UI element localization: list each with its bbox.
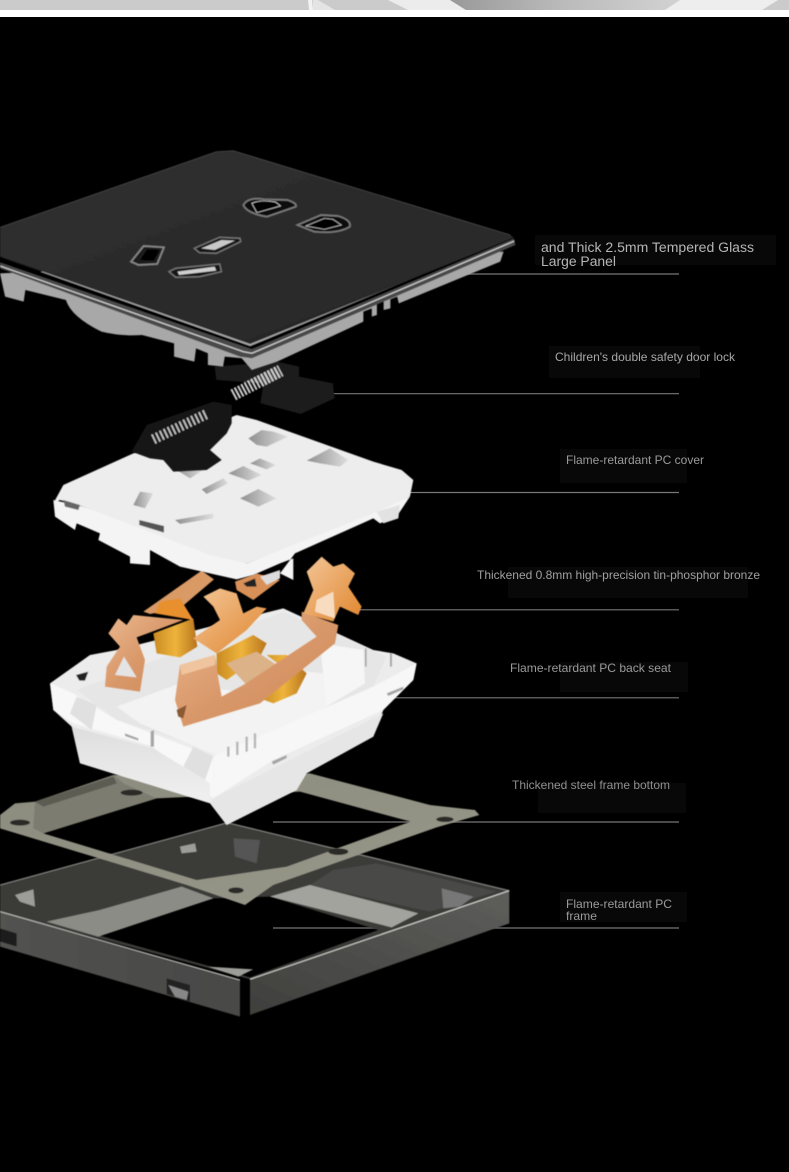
caption: tempered glass panel: and Thick 2.5mm Tempered Glass (541, 240, 754, 255)
cover latch with spring (132, 402, 232, 472)
flame-retardant PC frame (0, 823, 509, 1017)
back seat lower body (72, 727, 210, 803)
contact: right gold barrel (260, 655, 307, 703)
tin-phosphor bronze contacts (105, 557, 362, 727)
socket opening: lower slot (169, 264, 221, 277)
back seat clips (70, 697, 213, 780)
back seat small shadows (125, 648, 403, 765)
back seat silhouette (50, 608, 417, 825)
cover socket wells (133, 430, 348, 524)
steel frame shaded bars (33, 775, 157, 833)
contact: small plate (227, 652, 277, 685)
tray clips (15, 838, 473, 977)
contact: centre clip (193, 588, 267, 653)
back seat inner floor (77, 612, 387, 757)
back seat vents (228, 733, 255, 757)
flame-retardant PC cover (53, 415, 413, 585)
children's safety door lock (215, 362, 335, 414)
socket opening: centre slot (194, 237, 241, 253)
caption: PC frame: Flame-retardant PC (566, 897, 672, 911)
PC back seat (50, 608, 417, 825)
leader lines (273, 274, 679, 928)
frame left outer face (0, 912, 240, 1017)
tempered glass panel (0, 151, 515, 370)
cover top face (53, 415, 413, 563)
contact: left gold barrel (153, 618, 197, 657)
tray ledge shading (310, 863, 497, 912)
tray right plate (270, 885, 418, 927)
panel underside (0, 252, 504, 370)
cover side walls (53, 497, 410, 580)
caption: PC frame (566, 897, 672, 923)
contact: centre gold barrel (217, 635, 267, 680)
top image strip (0, 0, 789, 17)
caption: back seat: Flame-retardant PC back seat (510, 661, 672, 675)
panel rim (0, 238, 515, 358)
frame inner tray (0, 823, 509, 979)
caption: safety door lock: Children's double safety door lock (555, 350, 736, 364)
caption: tempered glass panel (541, 240, 754, 269)
caption: bronze contacts: Thickened 0.8mm high-precision tin-phosphor bronze (477, 568, 760, 582)
panel top face (0, 151, 514, 344)
dark caption backing blocks (508, 235, 776, 922)
caption: steel frame: Thickened steel frame bottom (512, 778, 670, 792)
back seat front rims (50, 683, 213, 798)
thickened steel frame (0, 773, 479, 905)
contact: upper tab (235, 573, 280, 600)
caption: PC cover: Flame-retardant PC cover (566, 453, 704, 467)
socket opening: right round (297, 215, 350, 232)
frame right outer face (250, 891, 509, 1015)
socket opening: left slot (131, 246, 164, 265)
tray left plate (47, 887, 213, 937)
tray bright upper edges (0, 823, 509, 891)
socket opening: upper round (243, 199, 296, 217)
caption: tempered glass panel: Large Panel (541, 254, 616, 269)
cover lower tabs (260, 570, 280, 585)
steel frame holes (10, 790, 454, 893)
contact: long lower strip (175, 612, 338, 727)
contact: long upper strip (143, 571, 214, 614)
door lock spring (233, 371, 281, 395)
contact: top right clip (303, 557, 362, 622)
frame front notch (167, 978, 190, 1002)
caption: PC frame: frame (566, 909, 597, 923)
contact: left clip (105, 615, 183, 692)
cover chip slot (139, 520, 164, 533)
